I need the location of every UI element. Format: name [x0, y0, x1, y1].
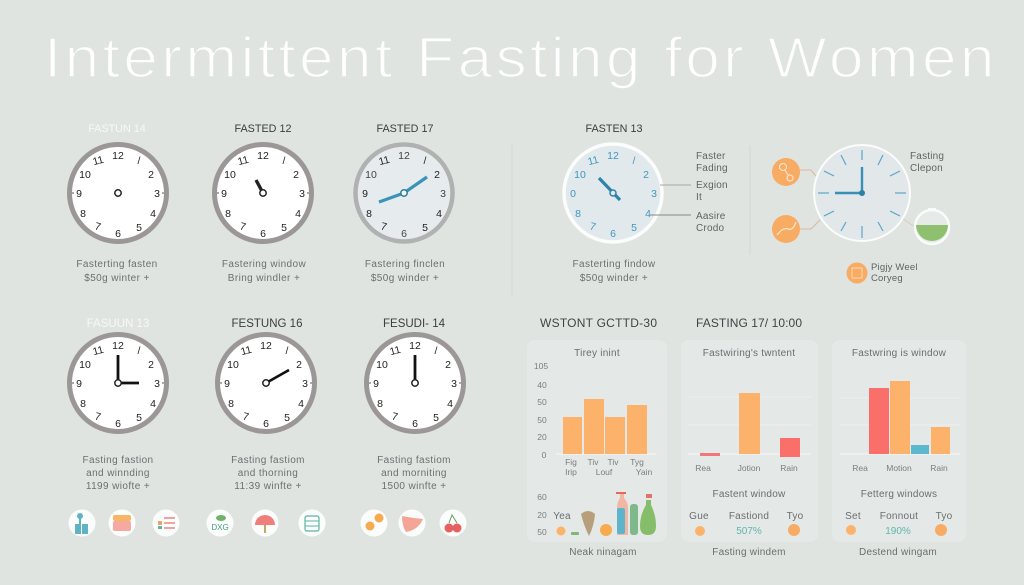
- panel: chart card 2: 507%: [736, 526, 762, 537]
- callout: clock labels: Aasire: [696, 211, 726, 222]
- panel: clock FESUDI 14: 2: [445, 359, 451, 371]
- panel: clock FASTEN 13: 5: [631, 222, 637, 234]
- panel: clock FASUUN 13: 4: [150, 398, 156, 410]
- panel: clock FASTUN 14: $50g winter +: [84, 273, 150, 284]
- panel: chart card 1: 105: [534, 361, 548, 371]
- panel: clock FASTED 17: [356, 123, 452, 284]
- panel: clock FESUDI 14: 9: [373, 378, 379, 390]
- panel: clock FASUUN 13: 6: [115, 418, 121, 430]
- panel: clock FASTUN 14: 4: [150, 208, 156, 220]
- panel: clock FASUUN 13: 3: [154, 378, 160, 390]
- panel: clock FESTUNG 16: 11:39 winfte +: [234, 481, 302, 492]
- panel: clock FESUDI 14: 5: [433, 412, 439, 424]
- icon: person: [68, 510, 96, 536]
- panel: clock FESTUNG 16: 8: [228, 398, 234, 410]
- panel: chart card 1: Tyg: [630, 457, 644, 467]
- panel: clock FASTED 17: FASTED 17: [376, 123, 434, 135]
- panel: chart card 2: Fastwiring's twntent: [703, 348, 795, 359]
- panel: clock FASTED 17: /: [424, 155, 427, 167]
- panel: chart card 2: Fasting windem: [712, 547, 786, 558]
- panel: clock FASUUN 13: FASUUN 13: [87, 318, 149, 330]
- panel: clock FASTED 12: FASTED 12: [234, 123, 292, 135]
- icon: food and bottles: [556, 492, 656, 536]
- panel: chart card 3: [832, 340, 966, 558]
- panel: large tick clock: Fasting: [910, 151, 944, 162]
- panel: clock FESUDI 14: 11: [388, 344, 402, 358]
- panel: clock FASTED 17: 5: [422, 222, 428, 234]
- panel: clock FASTED 12: 4: [295, 208, 301, 220]
- panel: chart card 2: Rain: [780, 463, 798, 473]
- icon: green jar gauge: [903, 208, 949, 244]
- panel: clock FASTEN 13: 8: [575, 208, 581, 220]
- callout: clock labels: Faster: [696, 151, 726, 162]
- panel: chart card 3: Fonnout: [880, 511, 918, 522]
- panel: chart card 1: Yea: [553, 511, 571, 522]
- panel: clock FASUUN 13: 7: [93, 410, 102, 424]
- panel: clock FASTEN 13: Fasterting findow: [573, 259, 656, 270]
- panel: clock FESUDI 14: 12: [409, 340, 421, 352]
- icon: orange chain badge: [772, 158, 816, 186]
- panel: clock FESUDI 14: 8: [377, 398, 383, 410]
- panel: chart card 1: Irip: [565, 467, 577, 477]
- panel: clock FASUUN 13: 12: [112, 340, 124, 352]
- panel: clock FASUUN 13: Fasting fastion: [82, 455, 154, 466]
- panel: clock FASTED 17: 11: [377, 154, 391, 168]
- panel: clock FESTUNG 16: 2: [296, 359, 302, 371]
- panel: clock FASTED 12: 11: [236, 154, 250, 168]
- panel: clock FASTED 12: Bring windler +: [228, 273, 300, 284]
- panel: clock FASTEN 13: [564, 123, 691, 284]
- panel: clock FESUDI 14: /: [435, 345, 438, 357]
- panel: chart card 3: Rea: [852, 463, 868, 473]
- icon: note badge with label: Coryeg: [871, 273, 903, 284]
- panel: clock FASUUN 13: 9: [76, 378, 82, 390]
- panel: clock FASTED 12: 12: [257, 150, 269, 162]
- panel: clock FESTUNG 16: 9: [224, 378, 230, 390]
- panel: clock FASTED 17: 10: [365, 169, 377, 181]
- panel: clock FASTEN 13: /: [633, 155, 636, 167]
- callout: clock labels: Crodo: [696, 223, 724, 234]
- panel: clock FASTED 12: 9: [221, 188, 227, 200]
- panel: chart card 3: 190%: [885, 526, 911, 537]
- panel: clock FASTUN 14: 9: [76, 188, 82, 200]
- panel: clock FASTEN 13: 2: [643, 169, 649, 181]
- panel: clock FASTED 17: 2: [434, 169, 440, 181]
- panel: clock FESTUNG 16: 3: [302, 378, 308, 390]
- icon: stack: [298, 510, 326, 536]
- icon: liver: [398, 510, 426, 536]
- panel: clock FASTED 12: 3: [299, 188, 305, 200]
- panel: clock FASTEN 13: 10: [574, 169, 586, 181]
- panel: chart card 3: Fetterg windows: [861, 489, 937, 500]
- panel: clock FASTUN 14: Fasterting fasten: [76, 259, 158, 270]
- panel: clock FESUDI 14: FESUDI- 14: [383, 318, 446, 330]
- panel: clock FASTED 12: 10: [224, 169, 236, 181]
- panel: clock FASTEN 13: 12: [607, 150, 619, 162]
- panel: chart card 1: 20: [537, 432, 547, 442]
- panel: clock FASUUN 13: 8: [80, 398, 86, 410]
- icon: sprout: DXG: [211, 523, 229, 532]
- icon: list: [152, 510, 180, 536]
- panel: chart card 1: Yain: [636, 467, 652, 477]
- icon: note badge with label: Pigjy Weel: [871, 262, 918, 273]
- panel: clock FASTUN 14: 12: [112, 150, 124, 162]
- panel: clock FESUDI 14: 4: [447, 398, 453, 410]
- callout: clock labels: [696, 151, 728, 234]
- panel: clock FASTED 12: 7: [238, 220, 247, 234]
- panel: clock FASTEN 13: 3: [651, 188, 657, 200]
- panel: clock FASTED 17: Fastering finclen: [365, 259, 445, 270]
- panel: chart card 2: Gue: [689, 511, 709, 522]
- panel: clock FASTED 17: 7: [379, 220, 388, 234]
- panel: clock FASTUN 14: 2: [148, 169, 154, 181]
- panel: clock FASTED 17: 12: [398, 150, 410, 162]
- panel: clock FESUDI 14: [366, 318, 464, 492]
- panel: clock FESTUNG 16: 11: [239, 344, 253, 358]
- panel: clock FASTED 12: 6: [260, 228, 266, 240]
- bar chart: four bars: [869, 381, 950, 454]
- panel: clock FESUDI 14: 7: [390, 410, 399, 424]
- panel: clock FASTUN 14: /: [138, 155, 141, 167]
- icon: umbrella: [252, 510, 278, 536]
- panel: clock FASTED 17: 3: [440, 188, 446, 200]
- panel: chart card 3: Tyo: [936, 511, 953, 522]
- panel: clock FESUDI 14: 10: [376, 359, 388, 371]
- panel: clock FESUDI 14: and morniting: [381, 468, 447, 479]
- icon: sprout: [206, 510, 234, 536]
- panel: chart card 3: Set: [845, 511, 861, 522]
- panel: clock FASUUN 13: /: [138, 345, 141, 357]
- panel: clock FASUUN 13: 10: [79, 359, 91, 371]
- panel: chart card 1: Tiv: [607, 457, 619, 467]
- panel: clock FASTEN 13: 0: [570, 188, 576, 200]
- panel: clock FASTED 17: 4: [436, 208, 442, 220]
- panel: chart card 2: Tyo: [787, 511, 804, 522]
- panel: chart card 1: 50: [537, 397, 547, 407]
- title: Intermittent Fasting for Women: [44, 25, 994, 89]
- panel: chart card 1: 50: [537, 527, 547, 537]
- heading: chart section right: FASTING 17/ 10:00: [696, 316, 802, 330]
- panel: clock FASTUN 14: FASTUN 14: [88, 123, 146, 135]
- bar chart: three bars: [700, 393, 800, 457]
- panel: clock FASUUN 13: 11: [91, 344, 105, 358]
- panel: clock FASTUN 14: 7: [93, 220, 102, 234]
- panel: clock FASTUN 14: 10: [79, 169, 91, 181]
- panel: clock FASTUN 14: 3: [154, 188, 160, 200]
- panel: clock FESUDI 14: 6: [412, 418, 418, 430]
- panel: clock FASTUN 14: [70, 123, 166, 284]
- panel: clock FESTUNG 16: 5: [284, 412, 290, 424]
- panel: clock FASUUN 13: 5: [136, 412, 142, 424]
- panel: clock FASUUN 13: and winnding: [86, 468, 150, 479]
- panel: large tick clock: [814, 145, 944, 241]
- panel: clock FESTUNG 16: 4: [298, 398, 304, 410]
- panel: clock FASTUN 14: 11: [91, 154, 105, 168]
- panel: clock FASTED 12: Fastering window: [222, 259, 306, 270]
- panel: clock FESUDI 14: 3: [451, 378, 457, 390]
- panel: clock FESTUNG 16: 12: [260, 340, 272, 352]
- callout: clock labels: Fading: [696, 163, 728, 174]
- panel: clock FASUUN 13: [70, 318, 166, 492]
- icon: orange trend badge: [772, 215, 820, 243]
- panel: clock FESTUNG 16: [218, 318, 314, 492]
- icon: coins: [360, 510, 388, 536]
- panel: chart card 1: 20: [537, 510, 547, 520]
- panel: chart card 3: Fastwring is window: [852, 348, 947, 359]
- panel: chart card 2: [681, 340, 818, 558]
- panel: clock FESTUNG 16: /: [286, 345, 289, 357]
- panel: chart card 1: Louf: [596, 467, 613, 477]
- bar chart: orange bars: [563, 399, 647, 454]
- panel: clock FASTED 17: 6: [401, 228, 407, 240]
- panel: chart card 2: Fastent window: [713, 489, 786, 500]
- panel: chart card 3: Motion: [886, 463, 912, 473]
- panel: clock FASTED 12: 2: [293, 169, 299, 181]
- icon: note badge with label: [846, 262, 918, 284]
- panel: chart card 1: 60: [537, 492, 547, 502]
- icon: calendar: [108, 510, 136, 536]
- icon: cherries: [440, 510, 466, 536]
- panel: clock FASTED 12: [214, 123, 312, 284]
- panel: clock FASTED 17: 9: [362, 188, 368, 200]
- panel: clock FESTUNG 16: FESTUNG 16: [232, 318, 302, 330]
- panel: clock FASTED 12: 8: [225, 208, 231, 220]
- panel: clock FESTUNG 16: 7: [241, 410, 250, 424]
- panel: clock FASTUN 14: 6: [115, 228, 121, 240]
- panel: chart card 1: 40: [537, 380, 547, 390]
- panel: clock FASUUN 13: 1199 wiofte +: [86, 481, 150, 492]
- panel: clock FASTEN 13: 6: [610, 228, 616, 240]
- panel: clock FASTEN 13: FASTEN 13: [585, 123, 643, 135]
- panel: clock FASTED 12: 5: [281, 222, 287, 234]
- panel: chart card 3: Destend wingam: [859, 547, 937, 558]
- panel: chart card 2: Rea: [695, 463, 711, 473]
- callout: clock labels: Exgion: [696, 180, 728, 191]
- panel: chart card 2: Jotion: [738, 463, 761, 473]
- panel: chart card 1: [527, 340, 667, 558]
- panel: clock FASTUN 14: 5: [136, 222, 142, 234]
- panel: chart card 3: Rain: [930, 463, 948, 473]
- panel: clock FESTUNG 16: 6: [263, 418, 269, 430]
- callout: clock labels: It: [696, 192, 702, 203]
- panel: clock FASTEN 13: 7: [588, 220, 597, 234]
- panel: clock FASTUN 14: 8: [80, 208, 86, 220]
- panel: clock FASUUN 13: 2: [148, 359, 154, 371]
- panel: chart card 1: 0: [542, 450, 547, 460]
- panel: clock FASTED 17: $50g winder +: [371, 273, 439, 284]
- panel: clock FESTUNG 16: Fasting fastiom: [231, 455, 305, 466]
- panel: clock FESTUNG 16: 10: [227, 359, 239, 371]
- panel: large tick clock: Clepon: [910, 163, 943, 174]
- panel: clock FASTEN 13: 11: [586, 154, 600, 168]
- panel: chart card 1: Neak ninagam: [569, 547, 637, 558]
- heading: chart section left: WSTONT GCTTD-30: [540, 316, 657, 330]
- panel: clock FASTED 12: /: [283, 155, 286, 167]
- panel: clock FASTED 17: 8: [366, 208, 372, 220]
- panel: clock FASTEN 13: 4: [645, 208, 651, 220]
- panel: clock FESUDI 14: Fasting fastiom: [377, 455, 451, 466]
- panel: clock FESUDI 14: 1500 winfte +: [382, 481, 446, 492]
- panel: chart card 2: Fastiond: [729, 511, 769, 522]
- panel: chart card 1: Tiv: [587, 457, 599, 467]
- panel: chart card 1: 50: [537, 415, 547, 425]
- panel: chart card 1: Tirey inint: [574, 348, 620, 359]
- panel: chart card 1: Fig: [565, 457, 577, 467]
- panel: clock FESTUNG 16: and thorning: [238, 468, 298, 479]
- panel: clock FASTEN 13: $50g winder +: [580, 273, 648, 284]
